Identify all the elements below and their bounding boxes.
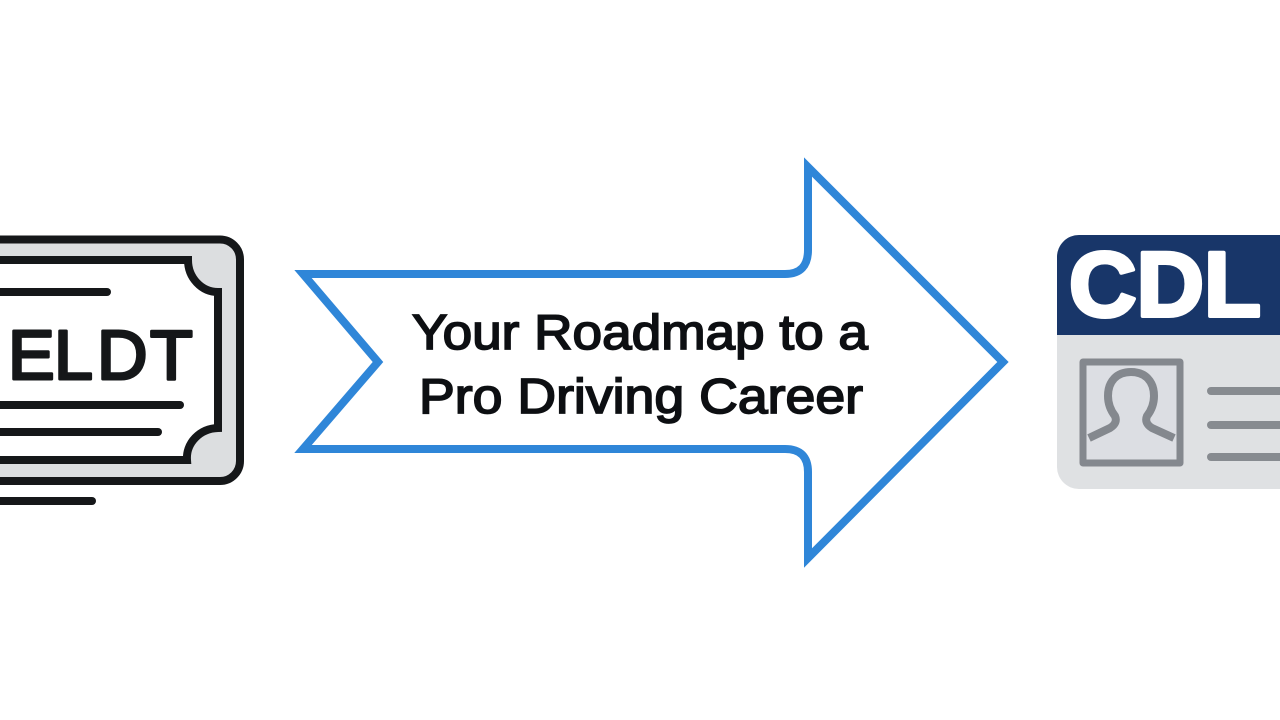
arrow with title xyxy=(303,167,1003,558)
title: Your Roadmap to a xyxy=(412,306,869,360)
arrow outline xyxy=(303,167,1003,558)
title: Pro Driving Career xyxy=(419,370,863,424)
label: ELDT: ELDT xyxy=(8,316,193,394)
card body xyxy=(1057,235,1280,489)
certificate text lines xyxy=(0,292,180,501)
label: CDL: CDL xyxy=(1069,234,1261,336)
icon: ELDT certificate xyxy=(0,240,240,501)
certificate inner frame xyxy=(0,260,218,460)
icon: CDL licence card xyxy=(1057,234,1280,489)
certificate outer card xyxy=(0,240,240,481)
card header xyxy=(1057,235,1280,335)
card detail lines xyxy=(1211,391,1280,457)
photo portrait xyxy=(1083,362,1180,463)
